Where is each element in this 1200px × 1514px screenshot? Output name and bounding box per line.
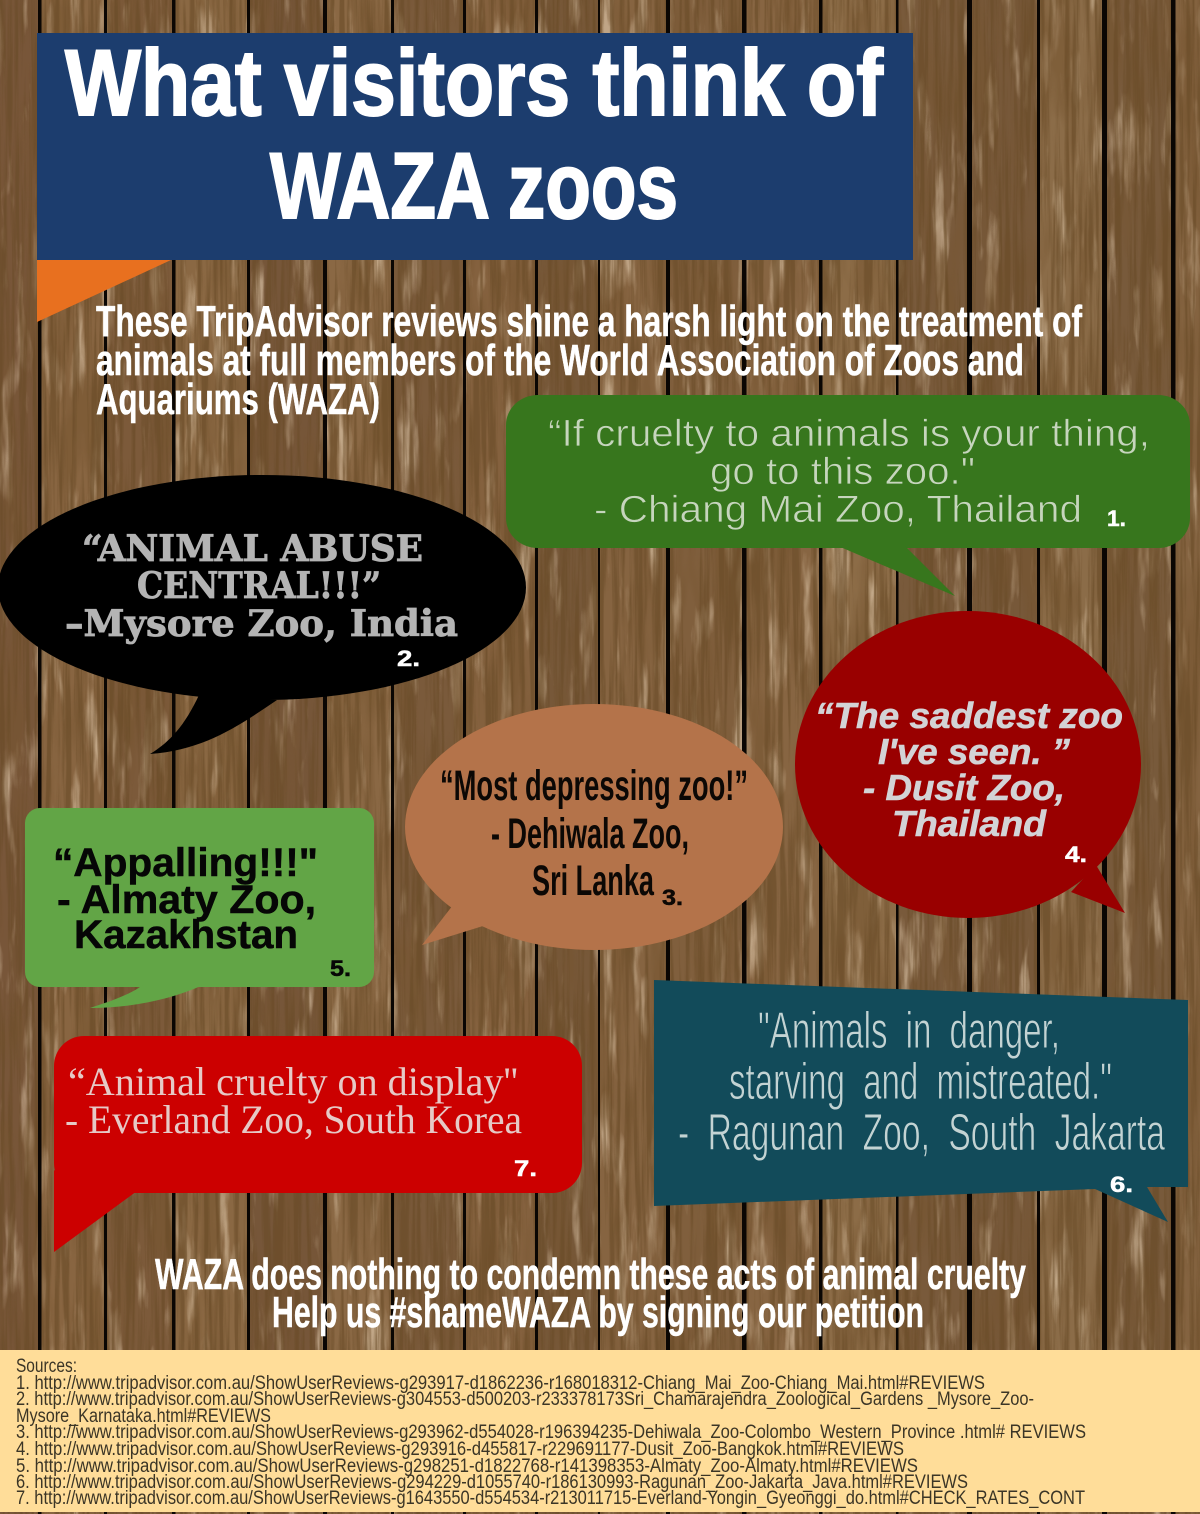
speech bubble 6: Ragunan Zoo: 6. xyxy=(1110,1172,1133,1197)
speech bubble 5: Almaty Zoo: - Almaty Zoo, xyxy=(57,878,316,922)
intro text: Aquariums (WAZA) xyxy=(96,375,380,424)
speech bubble 7: Everland Zoo xyxy=(54,1036,582,1252)
closing call to action xyxy=(155,1250,1026,1337)
title: WAZA zoos xyxy=(270,133,678,238)
speech bubble 2: Mysore Zoo xyxy=(0,475,526,754)
speech bubble 4: Dusit Zoo xyxy=(795,611,1141,918)
sources panel: Mysore_Karnataka.html#REVIEWS xyxy=(16,1406,271,1427)
sources panel: Sources: xyxy=(16,1356,77,1377)
speech bubble 4: Dusit Zoo: - Dusit Zoo, xyxy=(863,767,1065,808)
sources panel: 1. http://www.tripadvisor.com.au/ShowUserReviews-g293917-d1862236-r168018312-Chiang_Mai_Zoo-Chiang_Mai.html#REVIEWS xyxy=(16,1373,985,1394)
speech bubble 1: Chiang Mai Zoo: - Chiang Mai Zoo, Thailand xyxy=(594,489,1082,531)
intro text xyxy=(96,297,1082,424)
speech bubble 3: Dehiwala Zoo: “Most depressing zoo!” xyxy=(440,762,748,810)
speech bubble 5: Almaty Zoo: Kazakhstan xyxy=(74,913,298,957)
speech bubble 7: Everland Zoo: - Everland Zoo, South Korea xyxy=(65,1097,522,1142)
title: What visitors think of xyxy=(65,30,884,135)
speech bubble 5: Almaty Zoo: 5. xyxy=(330,956,351,981)
sources panel: 6. http://www.tripadvisor.com.au/ShowUserReviews-g294229-d1055740-r186130993-Ragunan_Zoo-Jakarta_Java.html#REVIEWS xyxy=(16,1472,968,1493)
speech bubble 7: Everland Zoo: “Animal cruelty on display'' xyxy=(68,1059,518,1104)
speech bubble 4: Dusit Zoo: “The saddest zoo xyxy=(815,695,1123,736)
speech bubble 2: Mysore Zoo: 2. xyxy=(397,646,420,671)
speech bubble 3: Dehiwala Zoo xyxy=(405,704,783,950)
speech bubble 2: Mysore Zoo: CENTRAL!!!” xyxy=(137,565,381,607)
speech bubble 1: Chiang Mai Zoo xyxy=(506,395,1190,596)
speech bubble 4: Dusit Zoo: Thailand xyxy=(892,803,1047,844)
speech bubble 1: Chiang Mai Zoo: 1. xyxy=(1107,506,1126,531)
speech bubble 2: Mysore Zoo: “ANIMAL ABUSE xyxy=(82,528,423,570)
speech bubble 3: Dehiwala Zoo: Sri Lanka xyxy=(532,857,655,905)
speech bubble 1: Chiang Mai Zoo: go to this zoo." xyxy=(710,451,975,493)
speech bubble 1: Chiang Mai Zoo: “If cruelty to animals is your thing, xyxy=(548,413,1150,455)
sources panel: 2. http://www.tripadvisor.com.au/ShowUserReviews-g304553-d500203-r233378173Sri_Chamarajendra_Zoological_Gardens _Mysore_Zoo- xyxy=(16,1389,1034,1410)
sources panel: 4. http://www.tripadvisor.com.au/ShowUserReviews-g293916-d455817-r229691177-Dusit_Zoo-Bangkok.html#REVIEWS xyxy=(16,1439,904,1460)
sources panel xyxy=(0,1350,1200,1512)
title xyxy=(65,30,884,238)
title banner xyxy=(37,30,913,322)
banner background xyxy=(37,33,913,260)
speech bubble 5: Almaty Zoo: “Appalling!!!" xyxy=(53,841,318,885)
sources panel: 5. http://www.tripadvisor.com.au/ShowUserReviews-g298251-d1822768-r141398353-Almaty_Zoo-Almaty.html#REVIEWS xyxy=(16,1456,918,1477)
speech bubble 3: Dehiwala Zoo: - Dehiwala Zoo, xyxy=(491,810,689,858)
speech bubble 4: Dusit Zoo: 4. xyxy=(1065,842,1087,867)
speech bubble 6: Ragunan Zoo xyxy=(654,980,1188,1222)
speech bubble 2: Mysore Zoo: –Mysore Zoo, India xyxy=(65,603,458,645)
speech bubble 5: Almaty Zoo xyxy=(25,808,374,1008)
closing call to action: Help us #shameWAZA by signing our petition xyxy=(272,1288,924,1337)
speech bubble 3: Dehiwala Zoo: 3. xyxy=(662,885,683,910)
banner fold xyxy=(37,260,171,322)
speech bubble 7: Everland Zoo: 7. xyxy=(514,1156,537,1181)
speech bubble 4: Dusit Zoo: I've seen. ” xyxy=(878,731,1070,772)
